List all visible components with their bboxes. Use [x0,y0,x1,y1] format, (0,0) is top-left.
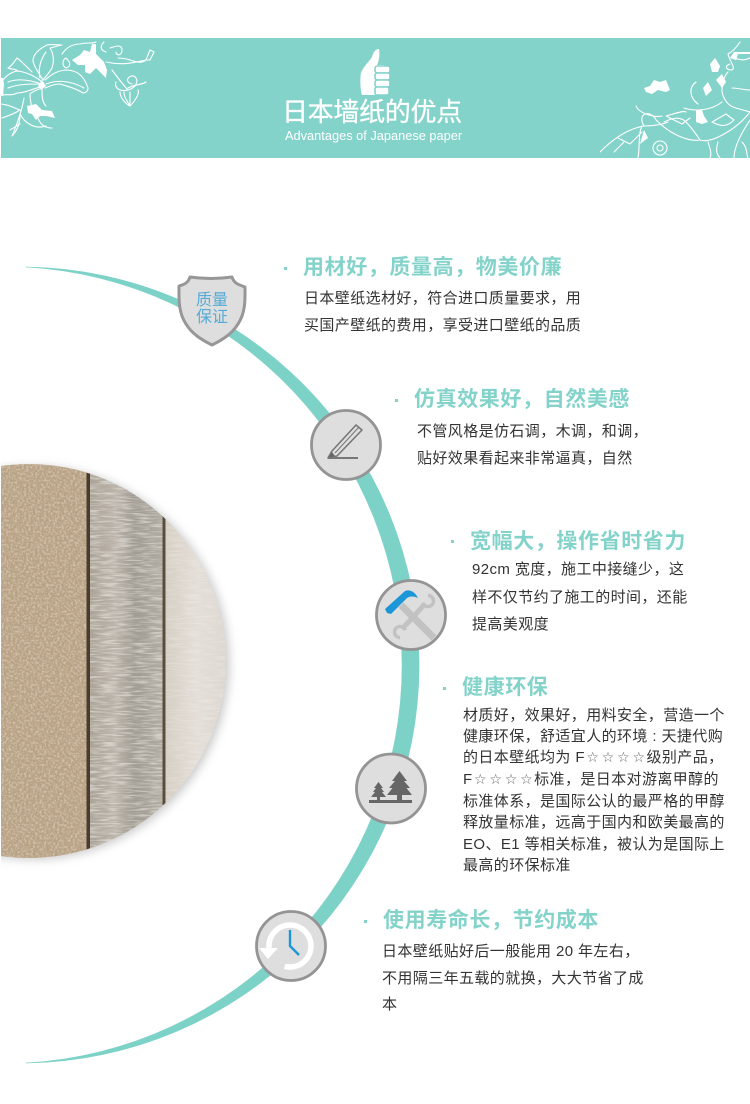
description: 92cm 宽度，施工中接缝少，这 [472,561,684,578]
description [472,561,688,633]
floral decoration: left [1,41,154,136]
floral decoration: right [600,41,750,158]
description: 不用隔三年五载的就换，大大节省了成 [382,970,644,986]
banner [1,38,750,158]
icon: trees [355,752,427,824]
section: quality [284,256,581,334]
bullet [395,399,398,402]
description [417,423,648,467]
shield label: 质量 [196,291,228,309]
subtitle: Advantages of Japanese paper [285,128,462,143]
description: 的日本壁纸均为 F 级别产品， [463,749,724,766]
description: 最高的环保标准 [463,857,571,874]
heading: 仿真效果好，自然美感 [414,388,630,411]
section: wide format [451,530,688,633]
heading: 健康环保 [462,676,548,699]
description [463,707,725,874]
section: realistic effect [395,388,648,467]
description: 材质好，效果好，用料安全，营造一个 [463,707,725,724]
description: ☆ [617,750,630,766]
icon: thumbs up [360,49,390,95]
heading: 宽幅大，操作省时省力 [470,530,686,553]
description: ☆ [505,772,517,788]
description: 买国产壁纸的费用，享受进口壁纸的品质 [304,317,581,334]
icon: clock with arrow [255,910,327,982]
icon: hammer and wrench [375,579,447,651]
description: ☆ [586,750,599,766]
description: EO、E1 等相关标准，被认为是国际上 [463,836,725,853]
arc [26,267,419,1063]
description: 贴好效果看起来非常逼真，自然 [417,450,633,467]
description: 本 [382,996,397,1013]
section: eco friendly [443,676,725,874]
description [304,290,581,334]
description: 不管风格是仿石调，木调，和调， [417,423,648,440]
description: ☆ [489,772,502,788]
decorative arc and wallpaper image [1,266,420,1064]
bullet [284,267,287,270]
description: ☆ [474,772,487,788]
description: 健康环保，舒适宜人的环境 : 天捷代购 [463,728,723,745]
description: 提高美观度 [472,616,549,633]
heading: 使用寿命长，节约成本 [383,909,599,932]
bullet [443,687,446,690]
description [382,943,644,1013]
icon: quality shield: 保证 [196,308,228,326]
heading: 用材好，质量高，物美价廉 [303,256,562,279]
description: 日本壁纸选材好，符合进口质量要求，用 [304,290,581,307]
icon: pencil [310,409,382,481]
bullet [451,540,454,543]
wallpaper image [0,440,230,880]
description: ☆ [633,750,645,766]
description: 标准体系，是国际公认的最严格的甲醇 [463,793,725,810]
description: 样不仅节约了施工的时间，还能 [472,588,688,606]
description: F 标准，是日本对游离甲醇的 [463,771,719,788]
title: 日本墙纸的优点 [282,97,462,127]
description: 日本壁纸贴好后一般能用 20 年左右， [382,943,640,960]
bullet [364,920,367,923]
description: ☆ [602,750,614,766]
icon: quality shield [178,276,246,346]
description: 释放量标准，远高于国内和欧美最高的 [463,814,725,831]
description: ☆ [520,772,533,788]
section: long lifespan [364,908,644,1013]
